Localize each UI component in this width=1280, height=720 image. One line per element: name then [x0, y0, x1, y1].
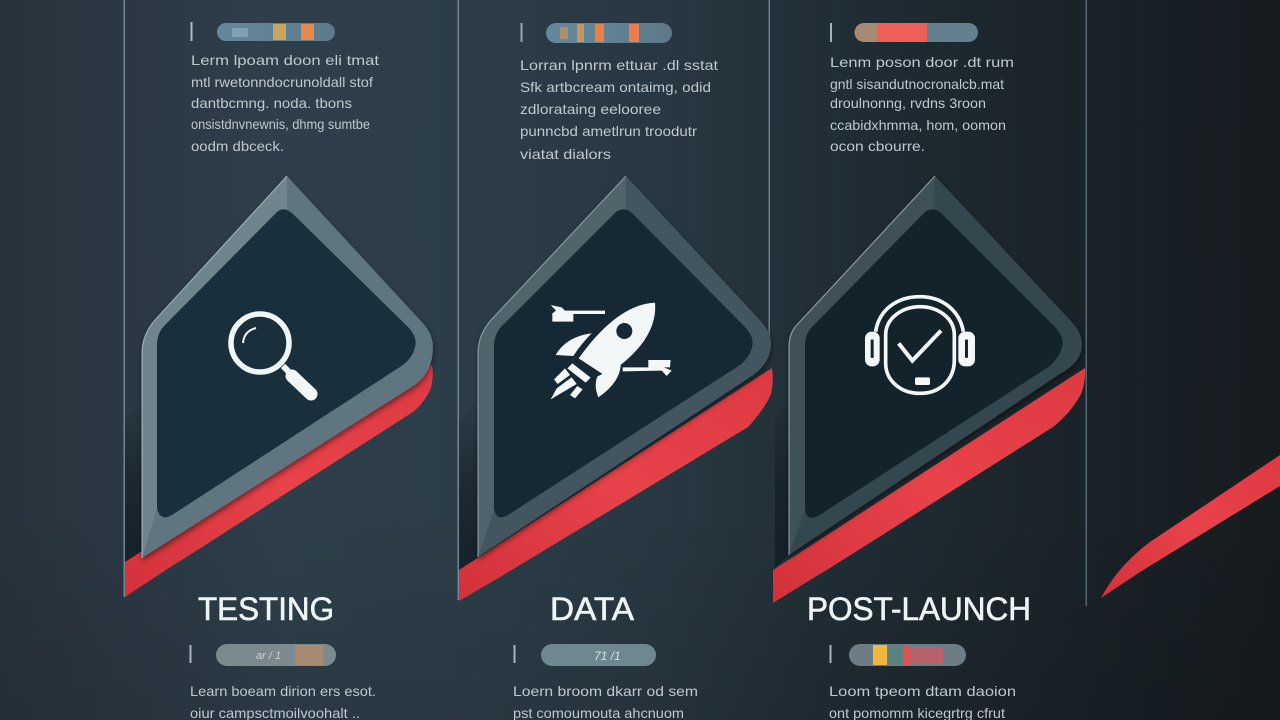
red ribbon: right edge: [1101, 455, 1280, 598]
tag pill: data top: [520, 23, 672, 43]
column divider 3: [768, 0, 770, 340]
left shadow: testing: [125, 400, 142, 562]
body text: data bottom: Loern broom dkarr od sem: [513, 683, 698, 699]
body text: data top: Sfk artbcream ontaimg, odid: [520, 79, 711, 95]
body text: data top: Lorran lpnrm ettuar .dl sstat: [520, 57, 718, 73]
column divider 4: [1086, 0, 1087, 606]
inner panel: [494, 209, 753, 517]
panel: data: [459, 23, 773, 720]
panel: testing: [125, 22, 433, 720]
heading: post-launch: POST-LAUNCH: [807, 591, 1031, 627]
red ribbon: [773, 368, 1085, 603]
body text: post-launch top: gntl sisandutnocronalcb.mat: [830, 76, 1004, 92]
body text: testing top: onsistdnvnewnis, dhmg sumtbe: [191, 116, 370, 132]
body text: testing top: mtl rwetonndocrunoldall stof: [191, 74, 373, 90]
column divider 2: [458, 0, 459, 600]
body text: post-launch bottom: [829, 683, 1016, 720]
icon: magnifying glass: [231, 314, 311, 394]
body text: testing top: Lerm lpoam doon eli tmat: [191, 52, 379, 68]
inner panel: [805, 209, 1063, 518]
red ribbon: [125, 365, 433, 597]
inner panel: [157, 209, 416, 517]
body text: post-launch top: Lenm poson door .dt rum: [830, 54, 1014, 70]
body text: data top: viatat dialors: [520, 146, 611, 162]
body text: post-launch top: ocon cbourre.: [830, 138, 925, 154]
body text: testing bottom: Learn boeam dirion ers esot.: [190, 683, 376, 699]
badge: post-launch: [773, 176, 1085, 603]
tag pill: data bottom: [514, 644, 656, 666]
body text: post-launch top: [830, 54, 1014, 154]
body text: data top: [520, 57, 718, 162]
tag pill: post-launch bottom: [830, 644, 966, 666]
tag pill: data bottom: 71 /1: [594, 649, 621, 663]
frame: [142, 176, 433, 558]
icon: headset with check: [865, 297, 975, 393]
badge: data: [459, 176, 773, 601]
frame: [789, 176, 1082, 555]
frame: [478, 176, 771, 557]
red ribbon: [459, 368, 773, 601]
badge: testing: [125, 176, 433, 597]
tag pill: testing bottom: ar / 1: [256, 650, 281, 662]
icon: rocket: [551, 303, 672, 399]
body text: data top: punncbd ametlrun troodutr: [520, 123, 697, 139]
body text: data top: zdlorataing eelooree: [520, 101, 661, 117]
tag pill: testing bottom: [190, 644, 336, 666]
left shadow: data: [459, 400, 478, 572]
heading: testing: TESTING: [198, 591, 334, 627]
body text: data bottom: [513, 683, 698, 720]
body text: post-launch top: ccabidxhmma, hom, oomon: [830, 117, 1006, 133]
column divider 1: [124, 0, 125, 597]
panel: post-launch: [773, 23, 1085, 720]
body text: post-launch bottom: Loom tpeom dtam daoion: [829, 683, 1016, 699]
body text: testing top: [191, 52, 379, 154]
body text: post-launch top: droulnonng, rvdns 3roon: [830, 95, 986, 111]
heading: data: DATA: [550, 591, 635, 627]
tag pill: post-launch top: [830, 23, 978, 42]
body text: testing bottom: [190, 683, 376, 720]
body text: testing top: dantbcmng. noda. tbons: [191, 95, 352, 111]
body text: testing top: oodm dbceck.: [191, 138, 284, 154]
left shadow: post-launch: [775, 400, 789, 568]
tag pill: testing top: [190, 22, 335, 41]
